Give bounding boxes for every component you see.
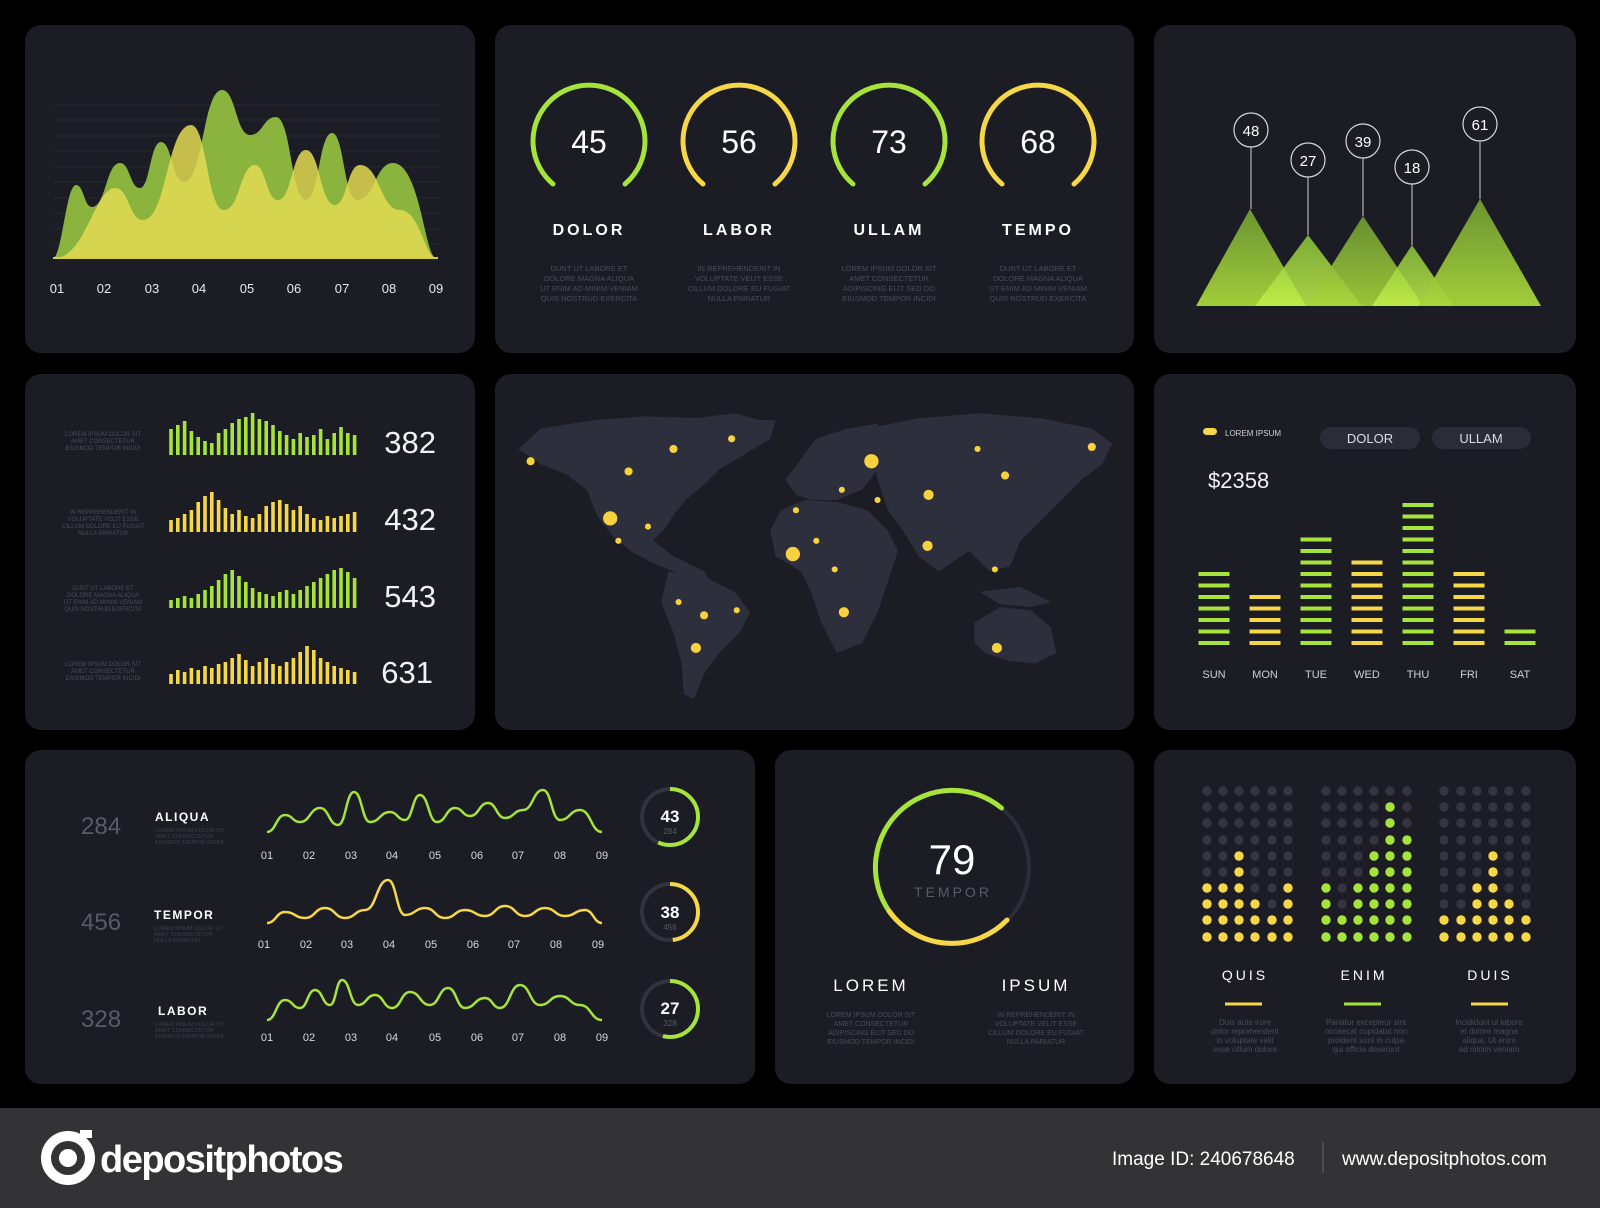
footer bar bbox=[0, 1108, 1600, 1208]
axis labels: 07 bbox=[508, 939, 520, 951]
tiny captions: AMET CONSECTETUR bbox=[71, 669, 136, 675]
panel: radial 79: ADIPISCING ELIT SED DO bbox=[828, 1030, 914, 1037]
gauge: 56 labor: CILLUM DOLORE EU FUGIAT bbox=[688, 284, 791, 293]
axis labels: 08 bbox=[554, 850, 566, 862]
row values: 543 bbox=[384, 579, 436, 614]
gauge: 68 tempo: 68 bbox=[1020, 124, 1056, 160]
panel: mountain chart: 18 bbox=[1404, 160, 1420, 177]
lorem / ipsum: IPSUM bbox=[1002, 976, 1070, 995]
tiny captions: DUNT UT LABORE ET bbox=[72, 586, 134, 592]
axis labels: 09 bbox=[596, 1032, 608, 1044]
gauge: 45 dolor: DOLOR bbox=[553, 222, 625, 239]
axis labels: 03 bbox=[345, 850, 357, 862]
panel: dot matrix: Pariatur excepteur sint bbox=[1326, 1018, 1407, 1027]
button: ullam: ULLAM bbox=[1459, 431, 1503, 446]
day labels: WED bbox=[1354, 669, 1380, 681]
x-axis labels: 05 bbox=[240, 281, 254, 296]
dot labels bbox=[1222, 967, 1513, 983]
donut 38: 38 bbox=[661, 903, 679, 922]
x-axis labels: 01 bbox=[50, 281, 64, 296]
panel: line series: NULLA PARIATUR bbox=[154, 938, 200, 944]
panel: mountain chart bbox=[1154, 25, 1576, 353]
axis labels: 06 bbox=[467, 939, 479, 951]
gauge: 56 labor bbox=[683, 85, 795, 303]
tiny captions: VOLUPTATE VELIT ESSE bbox=[68, 517, 138, 523]
axis labels: 03 bbox=[345, 1032, 357, 1044]
left numbers: 328 bbox=[81, 1006, 121, 1033]
panel: dot matrix: occaecat cupidatat non bbox=[1325, 1027, 1407, 1036]
panel: dot matrix: proident sunt in culpa bbox=[1328, 1036, 1405, 1045]
wave 1 bbox=[267, 790, 602, 832]
gauge: 68 tempo: DOLORE MAGNA ALIQUA bbox=[993, 274, 1083, 283]
tiny captions: LOREM IPSUM DOLOR SIT bbox=[65, 662, 141, 668]
donut 38 bbox=[642, 884, 698, 940]
gauge: 68 tempo: DUNT UT LABORE ET bbox=[1000, 264, 1077, 273]
left numbers: 284 bbox=[81, 813, 121, 840]
bars row 1 bbox=[171, 413, 355, 455]
panel: line series: AMET CONSECTETUR bbox=[155, 1028, 214, 1034]
panel: dot matrix: dolor reprehenderit bbox=[1211, 1027, 1280, 1036]
panel: line series: LOREM IPSUM DOLOR SIT bbox=[155, 1022, 225, 1028]
panel: dot matrix: Duis aute irure bbox=[1219, 1018, 1272, 1027]
day labels: FRI bbox=[1460, 669, 1478, 681]
lit dots group duis bbox=[1439, 851, 1531, 942]
day labels: MON bbox=[1252, 669, 1278, 681]
x-axis labels: 09 bbox=[429, 281, 443, 296]
wave 2 bbox=[267, 880, 602, 923]
axis labels bbox=[258, 850, 608, 1044]
map continents bbox=[518, 413, 1112, 699]
footer image id: Image ID: 240678648 bbox=[1112, 1149, 1295, 1170]
donut 43 bbox=[642, 789, 698, 845]
legend bbox=[1203, 428, 1281, 438]
tiny captions: AMET CONSECTETUR bbox=[71, 439, 136, 445]
x-axis labels: 02 bbox=[97, 281, 111, 296]
gauge: 73 ullam: ADIPISCING ELIT SED DO bbox=[843, 284, 935, 293]
gauge: 73 ullam: LOREM IPSUM DOLOR SIT bbox=[841, 264, 937, 273]
amount: $2358 bbox=[1208, 468, 1269, 493]
tiny captions: EIUSMOD TEMPOR INCIDI bbox=[66, 676, 141, 682]
day labels: SAT bbox=[1510, 669, 1531, 681]
axis labels: 08 bbox=[554, 1032, 566, 1044]
axis labels: 05 bbox=[429, 850, 441, 862]
gauge: 68 tempo: UT ENIM AD MINIM VENIAM bbox=[989, 284, 1087, 293]
panel: dot matrix: ad minim veniam bbox=[1459, 1045, 1520, 1054]
dot labels: QUIS bbox=[1222, 967, 1268, 983]
panel: dot matrix: qui officia deserunt bbox=[1332, 1045, 1400, 1054]
tiny captions: IN REPREHENDERIT IN bbox=[70, 510, 136, 516]
panel: radial 79: EIUSMOD TEMPOR INCIDI bbox=[827, 1039, 915, 1046]
gauge: 56 labor: NULLA PARIATUR bbox=[708, 294, 771, 303]
gauge: 73 ullam: 73 bbox=[871, 124, 907, 160]
gauge: 56 labor: IN REPREHENDERIT IN bbox=[697, 264, 781, 273]
area chart: green series bbox=[53, 90, 436, 258]
panel: dot matrix: Incididunt ut labore bbox=[1455, 1018, 1523, 1027]
axis labels: 01 bbox=[261, 850, 273, 862]
gauge: 73 ullam bbox=[833, 85, 945, 303]
gauge: 45 dolor: 45 bbox=[571, 124, 607, 160]
row values: 432 bbox=[384, 502, 436, 537]
axis labels: 07 bbox=[512, 850, 524, 862]
gauge: 56 labor: 56 bbox=[721, 124, 757, 160]
day labels bbox=[1202, 669, 1531, 681]
gauge: 45 dolor: DUNT UT LABORE ET bbox=[551, 264, 628, 273]
row values bbox=[381, 425, 436, 690]
dot labels: ENIM bbox=[1340, 967, 1388, 983]
lorem / ipsum: LOREM bbox=[833, 976, 909, 995]
axis labels: 07 bbox=[512, 1032, 524, 1044]
gauge: 45 dolor: UT ENIM AD MINIM VENIAM bbox=[540, 284, 638, 293]
button: dolor bbox=[1320, 427, 1420, 449]
button: ullam bbox=[1432, 427, 1531, 449]
panel: line series: AMET CONSECTETUR bbox=[155, 834, 214, 840]
axis labels: 01 bbox=[261, 1032, 273, 1044]
axis labels: 04 bbox=[383, 939, 395, 951]
donut 38: 456 bbox=[663, 923, 677, 932]
panel: line series: LOREM IPSUM DOLOR SIT bbox=[155, 828, 225, 834]
day labels: THU bbox=[1407, 669, 1429, 681]
row labels bbox=[154, 810, 214, 1018]
panel: mountain chart: 39 bbox=[1355, 134, 1371, 151]
gauge: 56 labor: VOLUPTATE VELIT ESSE bbox=[695, 274, 783, 283]
tiny captions: UT ENIM AD MINIM VENIAM bbox=[64, 600, 142, 606]
left numbers: 456 bbox=[81, 909, 121, 936]
panel: world map bbox=[495, 374, 1134, 730]
panel: mountain chart: 48 bbox=[1243, 123, 1259, 140]
footer url: www.depositphotos.com bbox=[1341, 1149, 1547, 1170]
footer logo: depositphotos bbox=[100, 1139, 343, 1181]
panel: dot matrix: aliqua. Ut enim bbox=[1462, 1036, 1516, 1045]
tiny captions: DOLORE MAGNA ALIQUA bbox=[67, 593, 139, 599]
dot grid background bbox=[1202, 786, 1531, 942]
axis labels: 02 bbox=[303, 850, 315, 862]
footer logo bbox=[41, 1130, 343, 1185]
panel: radial 79: NULLA PARIATUR bbox=[1007, 1039, 1065, 1046]
bars row 2 bbox=[171, 492, 355, 532]
panel: gauges bbox=[495, 25, 1134, 353]
axis labels: 04 bbox=[386, 1032, 398, 1044]
panel: weekly equalizer bbox=[1154, 374, 1576, 730]
axis labels: 09 bbox=[592, 939, 604, 951]
tiny captions: NULLA PARIATUR bbox=[78, 531, 129, 537]
x-axis labels: 08 bbox=[382, 281, 396, 296]
x-axis labels: 06 bbox=[287, 281, 301, 296]
panel: radial 79: CILLUM DOLORE EU FUGIAT bbox=[988, 1030, 1085, 1037]
axis labels: 05 bbox=[429, 1032, 441, 1044]
gauge: 45 dolor: DOLORE MAGNA ALIQUA bbox=[544, 274, 634, 283]
panel: line series: LOREM IPSUM DOLOR SIT bbox=[154, 926, 224, 932]
tiny captions: CILLUM DOLORE EU FUGIAT bbox=[62, 524, 144, 530]
gauge: 68 tempo: QUIS NOSTRUD EXERCITA bbox=[990, 294, 1086, 303]
x-axis labels bbox=[50, 281, 443, 296]
axis labels: 03 bbox=[341, 939, 353, 951]
donut 27: 27 bbox=[661, 999, 679, 1018]
x-axis labels: 04 bbox=[192, 281, 206, 296]
panel: bar rows bbox=[25, 374, 475, 730]
axis labels: 08 bbox=[550, 939, 562, 951]
axis labels: 04 bbox=[386, 850, 398, 862]
donut 43: 284 bbox=[663, 827, 677, 836]
axis labels: 02 bbox=[303, 1032, 315, 1044]
panel: line series: EIUSMOD TEMPOR INCIDI bbox=[155, 840, 224, 846]
axis labels: 01 bbox=[258, 939, 270, 951]
panel: radial 79: AMET CONSECTETUR bbox=[834, 1021, 908, 1028]
panel: dot matrix bbox=[1154, 750, 1576, 1084]
panel: line series: AMET CONSECTETUR bbox=[154, 932, 213, 938]
gauge: 45 dolor bbox=[533, 85, 645, 303]
gauge: 73 ullam: ULLAM bbox=[854, 222, 924, 239]
lit dots group quis bbox=[1202, 851, 1293, 942]
panel: radial 79 bbox=[775, 750, 1134, 1084]
equalizer bars bbox=[1198, 505, 1536, 643]
bars row 4 bbox=[171, 646, 355, 684]
row labels: LABOR bbox=[158, 1004, 208, 1018]
row labels: TEMPOR bbox=[154, 908, 214, 922]
axis labels: 05 bbox=[425, 939, 437, 951]
tiny captions: QUIS NOSTRUD EXERCITA bbox=[64, 607, 142, 613]
gauge: 45 dolor: QUIS NOSTRUD EXERCITA bbox=[541, 294, 637, 303]
gauge: 68 tempo bbox=[982, 85, 1094, 303]
tiny captions: LOREM IPSUM DOLOR SIT bbox=[65, 432, 141, 438]
bars row 3 bbox=[171, 568, 355, 608]
panel: radial 79: VOLUPTATE VELIT ESSE bbox=[995, 1021, 1078, 1028]
panel: radial 79: 79 bbox=[929, 836, 975, 883]
lorem / ipsum bbox=[833, 976, 1070, 995]
panel: area chart bbox=[25, 25, 475, 353]
donut 27: 328 bbox=[663, 1019, 677, 1028]
row labels: ALIQUA bbox=[155, 810, 210, 824]
legend: LOREM IPSUM bbox=[1225, 429, 1281, 438]
x-axis labels: 07 bbox=[335, 281, 349, 296]
day labels: SUN bbox=[1202, 669, 1226, 681]
panel: mountain chart: 61 bbox=[1472, 117, 1488, 134]
row values: 631 bbox=[381, 655, 433, 690]
panel: radial 79: LOREM IPSUM DOLOR SIT bbox=[827, 1012, 916, 1019]
tiny captions bbox=[62, 432, 144, 682]
axis labels: 09 bbox=[596, 850, 608, 862]
wave 3 bbox=[267, 980, 602, 1020]
panel: dot matrix: esse cillum dolore bbox=[1213, 1045, 1278, 1054]
x-axis labels: 03 bbox=[145, 281, 159, 296]
lit dots group enim bbox=[1321, 802, 1412, 942]
gauge: 68 tempo: TEMPO bbox=[1002, 222, 1074, 239]
donut 43: 43 bbox=[661, 807, 679, 826]
gauge: 56 labor: LABOR bbox=[703, 222, 775, 239]
axis labels: 06 bbox=[471, 1032, 483, 1044]
donut 27 bbox=[642, 981, 698, 1037]
map city dots bbox=[527, 435, 1096, 653]
area chart: yellow series bbox=[55, 125, 436, 258]
gauge: 73 ullam: EIUSMOD TEMPOR INCIDI bbox=[842, 294, 936, 303]
panel: dot matrix: et dolore magna bbox=[1460, 1027, 1518, 1036]
panel: line series bbox=[25, 750, 755, 1084]
axis labels: 02 bbox=[300, 939, 312, 951]
day labels: TUE bbox=[1305, 669, 1327, 681]
panel: dot matrix: in voluptate velit bbox=[1216, 1036, 1274, 1045]
row values: 382 bbox=[384, 425, 436, 460]
tiny captions: EIUSMOD TEMPOR INCIDI bbox=[66, 446, 141, 452]
gauge: 73 ullam: AMET CONSECTETUR bbox=[849, 274, 930, 283]
panel: line series: EIUSMOD TEMPOR INCIDI bbox=[155, 1034, 224, 1040]
panel: mountain chart: 27 bbox=[1300, 153, 1316, 170]
button: dolor: DOLOR bbox=[1347, 431, 1393, 446]
value bubbles bbox=[1234, 107, 1497, 184]
axis labels: 06 bbox=[471, 850, 483, 862]
panel: radial 79: TEMPOR bbox=[914, 884, 992, 900]
panel: radial 79: IN REPREHENDERIT IN bbox=[997, 1012, 1075, 1019]
dot labels: DUIS bbox=[1467, 967, 1513, 983]
left numbers bbox=[81, 813, 121, 1033]
